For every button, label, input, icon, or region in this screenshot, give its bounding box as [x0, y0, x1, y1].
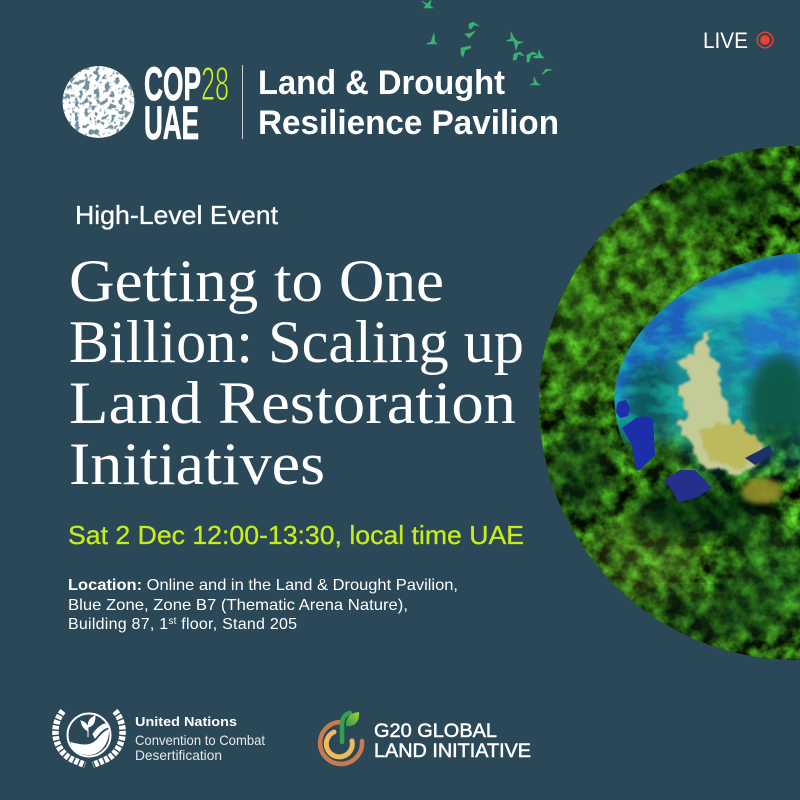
blue land patches — [616, 400, 772, 502]
UAE wordmark: UAE — [144, 96, 199, 149]
UNCCD subtitle: Convention to Combat — [135, 732, 265, 748]
COP28 UAE logo — [62, 66, 228, 140]
pavilion name: Land & Drought — [258, 64, 505, 102]
G20 name: LAND INITIATIVE — [374, 741, 531, 762]
earth in forest photo — [530, 140, 800, 670]
pavilion name — [258, 64, 559, 142]
COP wordmark: COP — [144, 57, 201, 110]
G20 Global Land Initiative logo — [320, 712, 531, 764]
title: Billion: Scaling up — [69, 309, 524, 375]
G20 name: G20 GLOBAL — [374, 721, 497, 742]
logo globe — [62, 66, 135, 139]
globe — [614, 253, 800, 482]
title: Land Restoration — [69, 370, 516, 436]
logo divider — [242, 65, 243, 139]
UNCCD name: United Nations — [135, 714, 237, 729]
G20 name — [374, 721, 531, 762]
live indicator — [703, 28, 773, 53]
title — [69, 248, 524, 497]
location: Building 87, 1 — [68, 616, 168, 633]
28 wordmark: 28 — [201, 57, 229, 110]
location: Blue Zone, Zone B7 (Thematic Arena Nature), — [68, 597, 408, 614]
event type label: High-Level Event — [75, 200, 279, 230]
UNCCD emblem — [55, 711, 123, 765]
location: floor, Stand 205 — [177, 616, 297, 633]
yellow land patch — [742, 478, 782, 504]
UN Convention to Combat Desertification logo — [55, 711, 265, 765]
land mass on globe — [676, 327, 762, 477]
location — [68, 577, 458, 633]
flock of birds — [422, 0, 552, 85]
title: Getting to One — [69, 248, 444, 314]
location: st — [168, 616, 177, 627]
title: Initiatives — [69, 431, 325, 497]
pavilion name: Resilience Pavilion — [258, 104, 559, 142]
G20 emblem — [320, 712, 362, 764]
UNCCD subtitle: Desertification — [135, 747, 222, 763]
date and time: Sat 2 Dec 12:00-13:30, local time UAE — [68, 520, 524, 550]
location: Location: Online and in the Land & Drought Pavilion, — [68, 577, 458, 594]
forest canopy — [530, 140, 800, 670]
live indicator: LIVE — [703, 28, 748, 53]
UNCCD subtitle — [135, 732, 265, 763]
